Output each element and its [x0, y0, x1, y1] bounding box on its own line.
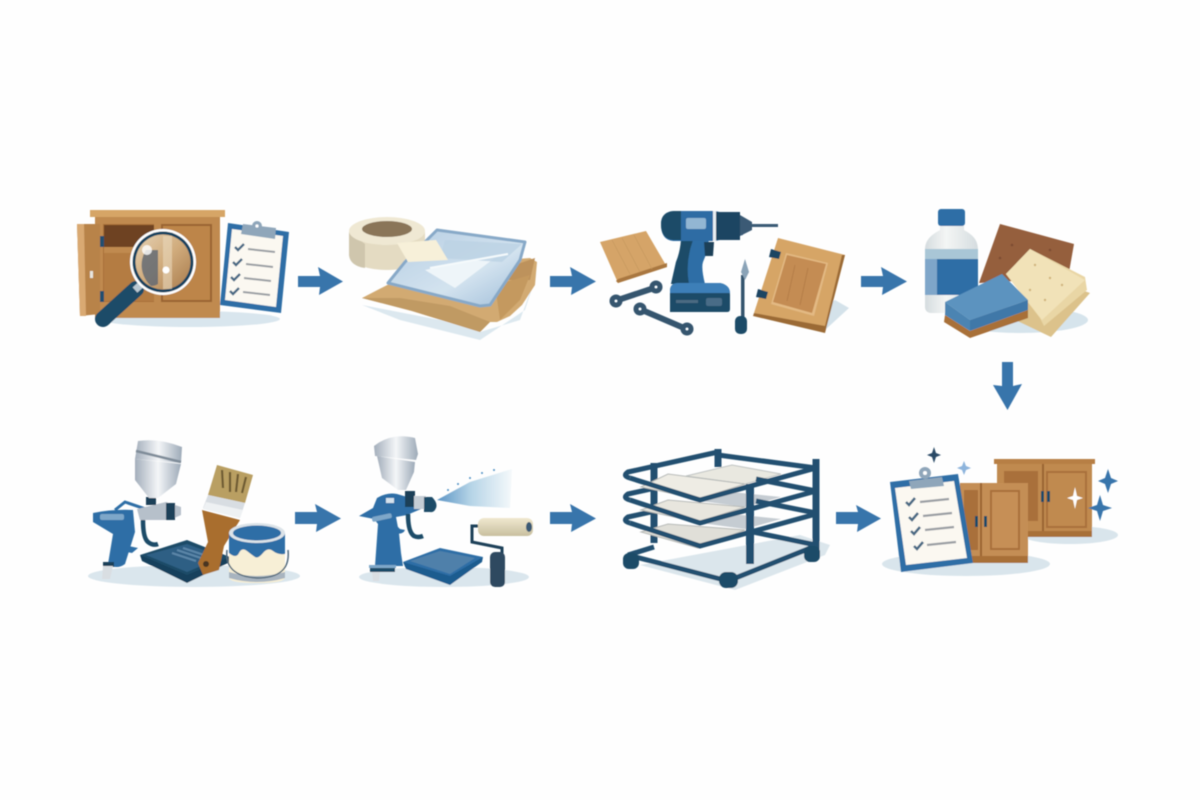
- brown sandpaper: [979, 224, 1074, 283]
- arrow 3: [861, 267, 907, 295]
- sparkles: [927, 447, 1118, 521]
- paint brush: [198, 465, 253, 575]
- step 4: bottle, sandpaper and sponge: [925, 209, 1090, 338]
- paint tray: [140, 540, 230, 583]
- tape strip: [397, 240, 448, 262]
- arrow 5: [295, 504, 341, 532]
- step 1: cabinet inspection: [77, 210, 289, 327]
- shadows: [882, 526, 1118, 576]
- rack frame front: [628, 468, 818, 581]
- paint roller: [472, 518, 533, 587]
- step 2: tape, plastic and cardboard: [349, 217, 538, 340]
- step 8: finished cabinets and checklist: [882, 447, 1118, 576]
- arrow 1: [298, 267, 343, 295]
- wrench 1: [612, 283, 660, 305]
- shadow: [100, 311, 280, 327]
- shadow: [640, 535, 830, 590]
- back shelf panels: [686, 465, 781, 529]
- arrow 2: [550, 267, 596, 295]
- step 3: drill, hardware and door: [600, 211, 849, 334]
- bottle: [925, 209, 978, 313]
- clipboard: [890, 467, 973, 572]
- step 5: spray gun, brush, tray and can: [88, 440, 300, 587]
- clipboard: [220, 221, 289, 313]
- arrow 6: [550, 504, 596, 532]
- cabinet door: [753, 238, 845, 333]
- back cabinet: [994, 459, 1095, 537]
- wood panel: [600, 231, 667, 283]
- spray gun: [93, 440, 182, 579]
- blue sponge: [944, 274, 1028, 338]
- wheels: [623, 546, 820, 588]
- wrench 2: [636, 305, 691, 333]
- front shelf panels: [641, 474, 745, 548]
- spray gun: [359, 436, 436, 581]
- screwdriver: [735, 259, 749, 334]
- door shadow: [800, 300, 849, 330]
- paint tray: [403, 548, 483, 585]
- shadow: [88, 565, 300, 587]
- rack frame rear: [625, 449, 816, 557]
- plastic sheet: [388, 230, 525, 306]
- shadow: [359, 567, 529, 587]
- step 6: spraying and roller: [359, 436, 533, 587]
- tape roll: [349, 217, 425, 270]
- cabinet: [77, 210, 225, 318]
- shadow: [952, 307, 1088, 333]
- front cabinet: [960, 483, 1028, 563]
- spray mist: [437, 469, 512, 508]
- arrow 4: down: [993, 362, 1022, 410]
- drill: [661, 211, 778, 312]
- paint can: [227, 523, 288, 583]
- magnifier: [103, 229, 196, 319]
- arrow 7: [836, 505, 881, 532]
- beige sponge stack: [1006, 249, 1090, 337]
- step 7: drying rack: [623, 449, 830, 590]
- cardboard: [362, 258, 538, 340]
